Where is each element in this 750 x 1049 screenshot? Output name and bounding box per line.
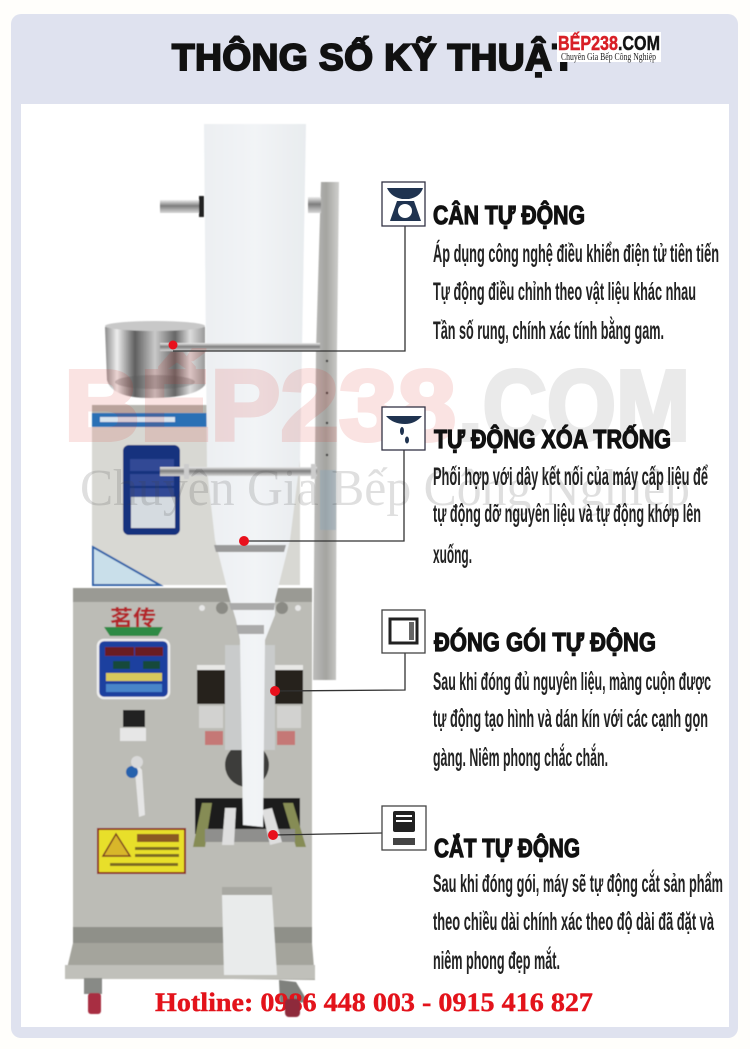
title: THÔNG SỐ KỸ THUẬT xyxy=(172,36,575,78)
callout line 1 xyxy=(173,226,405,351)
red marker dots xyxy=(168,340,280,840)
cabinet bolts xyxy=(199,602,301,614)
right wheel xyxy=(285,999,300,1017)
callout line 4 xyxy=(273,833,382,835)
blue label strip xyxy=(92,405,207,427)
output chute xyxy=(222,887,277,975)
upper steel bar xyxy=(160,343,320,351)
text block 1 xyxy=(433,239,719,345)
heading 4: CẮT TỰ ĐỘNG xyxy=(434,833,580,863)
left wheel xyxy=(84,978,102,1014)
brand mark on cabinet xyxy=(104,606,163,636)
icon: receipt xyxy=(382,806,426,850)
lower cabinet xyxy=(73,590,312,935)
hotline: Hotline: 0986 448 003 - 0915 416 827 xyxy=(155,988,593,1017)
upper hopper body xyxy=(92,405,300,585)
motor hub xyxy=(225,743,269,787)
heading 3: ĐÓNG GÓI TỰ ĐỘNG xyxy=(434,627,656,657)
brand mark on cabinet: 茗传 xyxy=(110,606,156,631)
icon: film frame xyxy=(382,610,425,653)
text block 3 xyxy=(433,668,711,772)
right support column xyxy=(313,182,339,680)
forming bracket xyxy=(225,645,275,750)
text block 2: xuống. xyxy=(433,541,472,569)
handle xyxy=(126,756,145,817)
sealing heaters xyxy=(197,665,303,745)
film roll and funnel xyxy=(204,124,306,827)
brand logo: BẾP238.COM xyxy=(558,32,660,55)
watermark: .COM xyxy=(458,350,690,462)
middle steel bar xyxy=(160,464,317,479)
upper control panel xyxy=(123,445,180,535)
icon: funnel drip xyxy=(382,407,425,450)
watermark: BẾP238 xyxy=(64,350,456,462)
brand logo: Chuyên Gia Bếp Công Nghiệp xyxy=(561,52,656,63)
text block 4: niêm phong đẹp mắt. xyxy=(433,945,560,975)
cutter opening xyxy=(193,798,306,847)
right wheel bracket xyxy=(279,980,308,1004)
icon: scale xyxy=(382,182,425,226)
blue triangle sticker xyxy=(93,547,160,585)
bowl xyxy=(105,321,205,398)
lower control panel xyxy=(98,640,169,698)
heading 2: TỰ ĐỘNG XÓA TRỐNG xyxy=(434,424,671,454)
watermark: Chuyên Gia Bếp Công Nghiệp xyxy=(80,460,690,517)
watermark xyxy=(64,350,690,517)
roller shaft xyxy=(160,196,321,217)
text block 4 xyxy=(433,868,723,975)
shelf and base xyxy=(65,927,315,980)
text block 2 xyxy=(433,463,708,569)
heading 1: CÂN TỰ ĐỘNG xyxy=(433,200,585,230)
machine photo xyxy=(65,124,339,1014)
brand logo xyxy=(557,32,661,63)
callout line 2 xyxy=(244,450,404,541)
power switch xyxy=(120,710,146,741)
warning label xyxy=(98,829,185,873)
callout line 3 xyxy=(275,653,405,691)
